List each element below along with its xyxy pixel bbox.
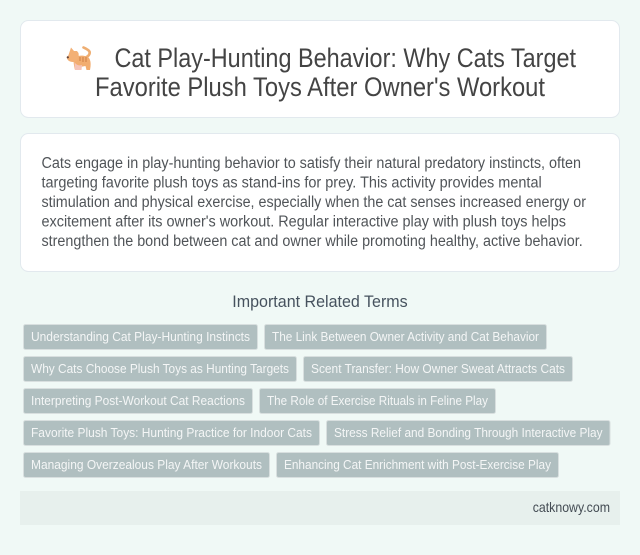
- panel: description: [20, 134, 620, 272]
- tag: [264, 324, 546, 350]
- tag: The Link Between Owner Activity and Cat Behavior: [272, 329, 540, 344]
- tag: [24, 356, 296, 382]
- title: Favorite Plush Toys After Owner's Workout: [95, 72, 546, 102]
- tag: [276, 452, 558, 478]
- panel: title card: [20, 20, 620, 118]
- tag: [24, 324, 258, 350]
- tag: Understanding Cat Play-Hunting Instincts: [31, 329, 250, 344]
- tag: Interpreting Post-Workout Cat Reactions: [31, 393, 245, 408]
- tag: Stress Relief and Bonding Through Interactive Play: [334, 425, 603, 440]
- tag: [260, 388, 496, 414]
- footer: [20, 491, 620, 525]
- tag: Why Cats Choose Plush Toys as Hunting Targets: [31, 361, 289, 376]
- tag: Favorite Plush Toys: Hunting Practice for Indoor Cats: [31, 425, 312, 440]
- tag: [24, 420, 320, 446]
- icon: cat: [67, 48, 91, 70]
- tag: [24, 388, 252, 414]
- tag: Enhancing Cat Enrichment with Post-Exercise Play: [284, 457, 551, 472]
- description text: [42, 155, 586, 250]
- tag: [24, 452, 270, 478]
- title: [95, 43, 577, 102]
- tag: The Role of Exercise Rituals in Feline Play: [267, 393, 488, 408]
- title: Cat Play-Hunting Behavior: Why Cats Target: [114, 43, 577, 73]
- tag list: [24, 324, 610, 478]
- tag: [326, 420, 610, 446]
- tag: Managing Overzealous Play After Workouts: [31, 457, 262, 472]
- tag: [304, 356, 572, 382]
- footer source: catknowy.com: [533, 500, 610, 515]
- heading: related terms: Important Related Terms: [232, 292, 408, 311]
- description text: strengthen the bond between cat and owner while promoting healthy, active behavior.: [42, 233, 583, 250]
- tag: Scent Transfer: How Owner Sweat Attracts Cats: [311, 361, 565, 376]
- description text: targeting favorite plush toys as stand-ins for prey. This activity provides mental: [42, 174, 542, 192]
- description text: excitement after its owner's workout. Regular interactive play with plush toys helps: [42, 214, 566, 230]
- description text: stimulation and physical exercise, especially when the cat senses increased energy or: [42, 194, 586, 211]
- description text: Cats engage in play-hunting behavior to satisfy their natural predatory instincts, often: [42, 155, 581, 172]
